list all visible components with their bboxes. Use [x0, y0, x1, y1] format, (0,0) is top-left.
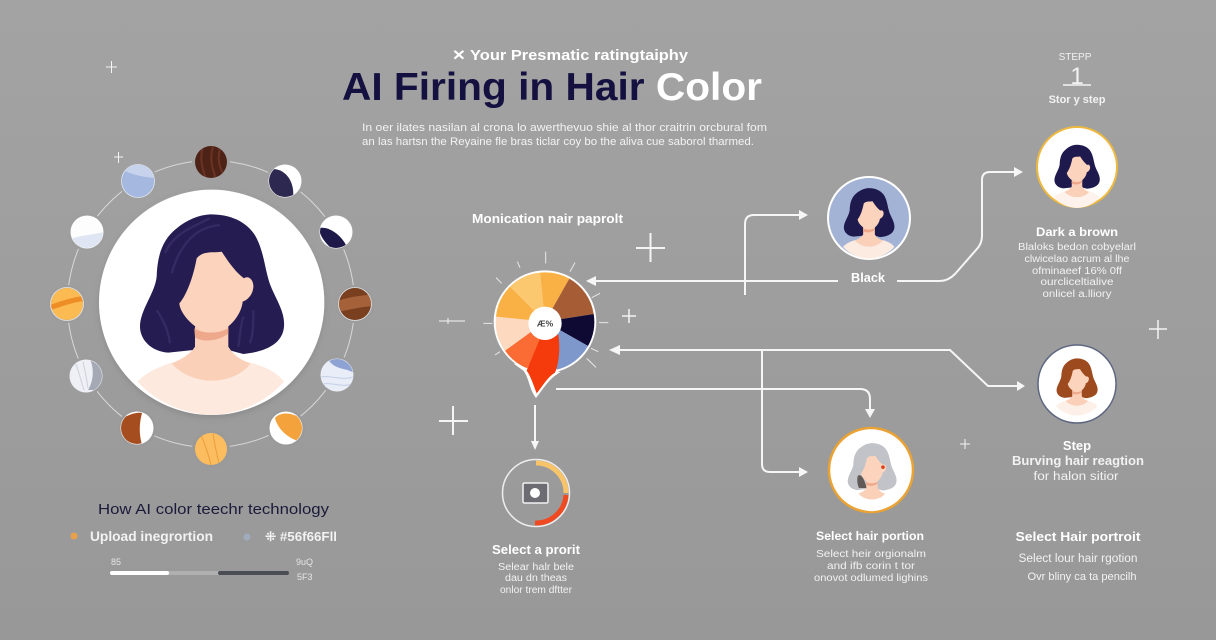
- connector arrows: [531, 167, 1025, 477]
- portrait disc: [99, 190, 324, 415]
- progress bar: 9uQ: [296, 557, 313, 567]
- earring: [881, 465, 885, 469]
- camera lens: [530, 488, 540, 498]
- portrait: black hair: [828, 177, 910, 259]
- wheel ticks: [483, 252, 608, 367]
- chin shadow: [194, 328, 228, 340]
- subtitle: [362, 122, 767, 148]
- subtitle: In oer ilates nasilan al crona lo awerthevuo shie al thor craitrin orcbural fom: [362, 122, 767, 134]
- slice: navy: [545, 314, 594, 346]
- text: step burving hair: [1012, 438, 1144, 483]
- legend text: upload: Upload inegrortion: [90, 528, 213, 544]
- swatch: orange: [50, 285, 84, 323]
- arrow: black to dark brown: [897, 172, 1017, 281]
- swatch: silver: [70, 358, 102, 392]
- swatch: golden: [192, 433, 230, 465]
- text: dark brown step: ofminaeef 16% 0ff: [1032, 266, 1122, 277]
- swatch: orange on white: [268, 412, 302, 444]
- slice: amber: [540, 272, 569, 322]
- text: dark brown step: clwicelao acrum al lhe: [1024, 254, 1130, 265]
- text: step burving hair: Burving hair reagtion: [1012, 453, 1144, 468]
- text: select hair portrait: Select lour hair rgotion: [1018, 553, 1138, 565]
- legend: [70, 528, 337, 544]
- disc: [829, 428, 913, 512]
- slice: red tip: [527, 327, 559, 393]
- slice: coral: [505, 322, 545, 368]
- slice: blue: [545, 322, 588, 370]
- figure: [843, 188, 894, 259]
- ring line: [68, 160, 354, 448]
- arrow: black to wheel: [592, 280, 838, 282]
- label: black: Black: [851, 270, 886, 285]
- neck: [172, 327, 251, 381]
- disc: [1037, 127, 1117, 207]
- text: select a profit: onlor trem dftter: [500, 585, 573, 596]
- step counter: 1: [1070, 63, 1084, 90]
- upload dial icon: [502, 460, 570, 526]
- dial ring: [502, 460, 570, 526]
- swatch: rust on white: [120, 412, 154, 444]
- pin tail outline: [513, 363, 561, 398]
- disc: [1038, 345, 1116, 423]
- figure: [1056, 358, 1098, 416]
- text: dark brown step: Dark a brown: [1036, 225, 1118, 239]
- swatch: white: [70, 216, 104, 249]
- swatch: brown: [338, 285, 372, 323]
- eyebrow text: ✕ Your Presmatic ratingtaiphy: [452, 48, 688, 64]
- slice: brown: [545, 279, 594, 322]
- slice: light orange: [510, 273, 545, 322]
- arrow: up to black portrait: [745, 215, 802, 295]
- heading: application hair portrait: Monication nair paprolt: [472, 211, 624, 226]
- arrow: wheel to auburn portrait: [616, 350, 1019, 386]
- figure: [1054, 145, 1100, 208]
- main portrait: [99, 190, 324, 415]
- text: select a profit: Selear halr bele: [498, 562, 574, 573]
- portrait ring with hair swatches: [48, 143, 374, 468]
- progress bar: 5F3: [297, 572, 313, 582]
- swatch: dark brown: [192, 146, 230, 178]
- text: step burving hair: Step: [1063, 438, 1091, 453]
- text: dark brown step: onlicel a.lliory: [1042, 289, 1112, 300]
- slice: peach: [496, 317, 545, 351]
- title: AI Firing in Hair Color: [342, 66, 762, 109]
- subtitle: an las hartsn the Reyaine fle bras ticlar coy bo the aliva cue saborol tharmed.: [362, 136, 754, 148]
- camera square: [523, 483, 548, 503]
- swatch: pale blue: [320, 357, 354, 392]
- shirt: [138, 363, 284, 415]
- text: select hair portrait: Ovr bliny ca ta pencilh: [1028, 571, 1136, 583]
- decorative sparkles: [106, 61, 1167, 449]
- text: dark brown step: [1018, 225, 1136, 300]
- red arc: [535, 495, 566, 523]
- how it works heading: How AI color teechr technology: [98, 501, 330, 518]
- text: select a profit: dau dn theas: [505, 573, 567, 584]
- portrait: dark brown: [1037, 127, 1117, 208]
- text: select hair portion: Select hair portion: [816, 529, 924, 543]
- portrait: auburn: [1038, 345, 1116, 423]
- disc: [828, 177, 910, 259]
- arrow: down to silver portrait: [762, 350, 802, 472]
- step counter: [1049, 52, 1106, 106]
- text: step burving hair: for halon sitior: [1034, 471, 1119, 483]
- arrow: pin to upload: [534, 405, 536, 444]
- progress bar: 85: [111, 557, 121, 567]
- text: select a profit: [492, 543, 581, 596]
- text: select hair portion: and ifb corin t tor: [827, 560, 916, 572]
- hub label: Æ%: [537, 319, 553, 329]
- wheel outline: [494, 270, 596, 373]
- text: select hair portion: [814, 529, 928, 584]
- hair: [140, 214, 284, 354]
- face: [179, 252, 253, 333]
- text: select hair portrait: Select Hair portroit: [1016, 529, 1141, 544]
- color wheel pin: [483, 252, 608, 398]
- arrow: pin to top of silver portrait: [556, 389, 870, 412]
- wheel hub: [528, 307, 562, 340]
- text: select hair portion: onovot odlumed lighins: [814, 572, 928, 584]
- text: dark brown step: Blaloks bedon cobyelarl: [1018, 242, 1136, 253]
- legend dot: orange: [70, 532, 78, 540]
- swatch: navy on white 2: [320, 216, 352, 250]
- text: select a profit: Select a prorit: [492, 543, 581, 557]
- step counter: Stor y step: [1049, 94, 1106, 106]
- swatch: periwinkle: [121, 164, 155, 198]
- swatch: navy on white 1: [268, 164, 302, 198]
- portrait: silver: [829, 428, 913, 512]
- legend text: hex: ⁜ #56f66Fll: [265, 529, 337, 544]
- text: dark brown step: ourcliceltialive: [1040, 277, 1114, 288]
- hair strands: [157, 218, 253, 347]
- dark hair shadow: [857, 475, 867, 488]
- progress bar: [110, 557, 313, 582]
- text: select hair portion: Select heir orgionalm: [816, 548, 926, 560]
- figure: [847, 443, 897, 511]
- text: select hair portrait: [1016, 529, 1141, 583]
- step counter: STEPP: [1059, 52, 1092, 63]
- legend dot: blue: [244, 534, 250, 540]
- yellow arc: [536, 463, 566, 493]
- slice: orange: [496, 287, 545, 322]
